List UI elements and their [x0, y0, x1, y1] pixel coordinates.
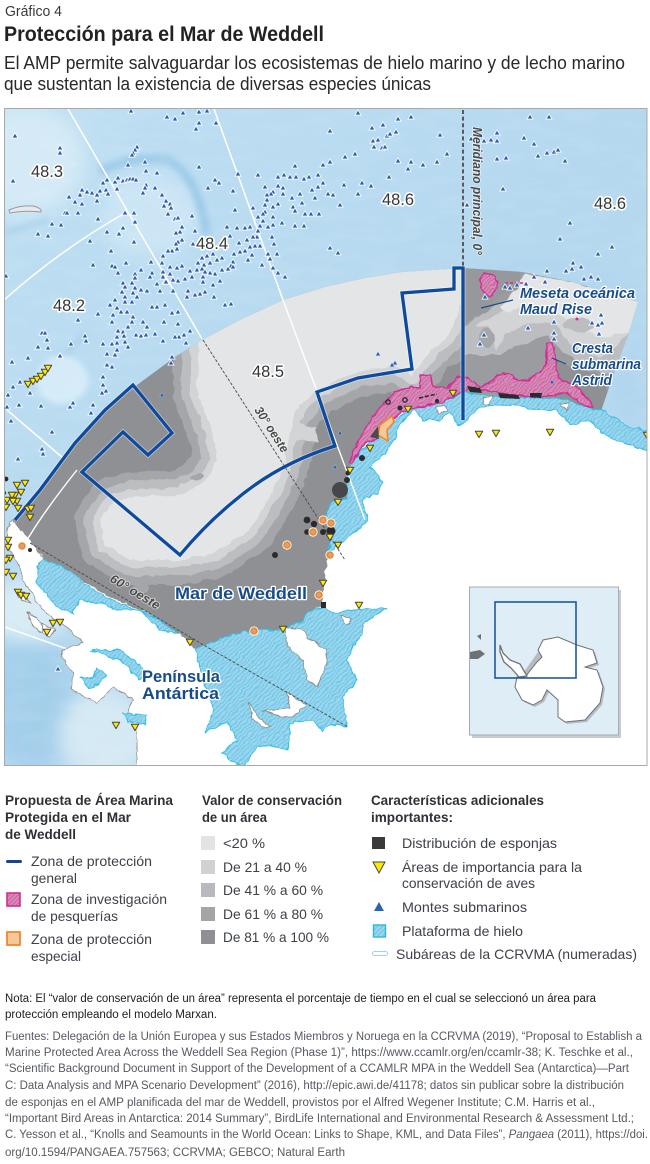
- pink dot: [576, 318, 578, 320]
- subarea labels: 48.4: [196, 235, 228, 253]
- peninsula islands: [16, 590, 55, 637]
- legend: conservation value: de un área: [202, 810, 267, 825]
- subarea labels: 48.5: [252, 363, 284, 381]
- legend: additional features: [371, 793, 637, 962]
- legend: proposed MPA: Zona de protección: [31, 853, 152, 869]
- west conservation contours: [100, 250, 466, 593]
- ice shelves: [37, 392, 650, 768]
- map panel: [0, 105, 650, 780]
- seamount swatch: [374, 902, 384, 911]
- ice shelf: small: [123, 713, 148, 724]
- fisheries research swatch: [7, 893, 20, 906]
- research zone: small strip: [505, 282, 527, 284]
- subarea labels: 48.3: [31, 163, 63, 181]
- legend: additional features: Subáreas de la CCRVMA (numeradas): [396, 946, 637, 962]
- land and ice group: [7, 392, 650, 770]
- legend: additional features: conservación de aves: [402, 875, 535, 891]
- legend: proposed MPA: Zona de protección: [31, 931, 152, 947]
- feature labels: Meseta oceánica: [520, 285, 635, 302]
- 60 degree meridian: [30, 543, 348, 727]
- subarea labels: 48.6: [382, 191, 414, 209]
- ice shelf: George VI: [80, 668, 106, 688]
- legend: conservation value: De 41 % a 60 %: [223, 882, 323, 898]
- map border: [4, 108, 647, 766]
- legend: proposed MPA: Protegida en el Mar: [5, 810, 132, 825]
- ice shelf: Filchner-Ronne: [195, 608, 387, 768]
- sources: [5, 1031, 648, 1159]
- legend: additional features: importantes:: [371, 810, 453, 825]
- sources: de esponjas en el AMP planificada del mar de Weddell, provistos por el Alfred Wegener Institute; C.M. Harris et al.,: [5, 1097, 595, 1109]
- sources: C: Data Analysis and MPA Scenario Development” (2016), http://epic.awi.de/41178; datos sin publicar sobre la distribución: [5, 1080, 624, 1092]
- legend: conservation value: [201, 793, 342, 945]
- sources: Marine Protected Area Across the Weddell Sea Region (Phase 1)”, https://www.ccamlr.org/en/ccamlr-38; K. Teschke et al.,: [5, 1047, 633, 1059]
- proposed MPA general protection zone: [15, 268, 463, 555]
- legend: additional features: Áreas de importancia para la: [402, 859, 582, 875]
- Antarctic land: [7, 392, 650, 770]
- legend: conservation value: De 21 a 40 %: [223, 859, 307, 875]
- sponge distribution: [2, 386, 542, 608]
- legend: proposed MPA: Zona de investigación: [31, 891, 167, 907]
- special protection swatch: [7, 932, 20, 945]
- legend: proposed MPA: de pesquerías: [31, 908, 118, 924]
- feature labels: Mar de Weddell: [175, 584, 307, 603]
- legend: additional features: Montes submarinos: [402, 899, 527, 915]
- inset locator map: [470, 587, 621, 738]
- subtitle: que sustentan la existencia de diversas especies únicas: [4, 73, 431, 94]
- special protection points: [22, 520, 331, 631]
- note: Nota: El “valor de conservación de un área” representa el porcentaje de tiempo en el cual se seleccionó un área para: [5, 993, 597, 1005]
- seamounts east: [328, 113, 612, 344]
- land islands in ice shelves: [249, 396, 570, 727]
- 30 degree meridian: [203, 340, 345, 560]
- seamounts inside protected area: [162, 354, 552, 467]
- feature labels: submarina: [572, 356, 641, 373]
- legend: proposed MPA: general: [31, 870, 77, 886]
- legend: additional features: Plataforma de hielo: [402, 923, 523, 939]
- ice shelf swatch: [374, 925, 386, 937]
- legend: additional features: Características adicionales: [371, 793, 544, 808]
- special protection zone: [378, 416, 394, 441]
- header: [4, 3, 625, 94]
- sources: “Scientific Background Document in Support of the Development of a CCAMLR MPA in the Weddell Sea (Antarctica)—Part: [5, 1063, 630, 1075]
- feature labels: Cresta: [572, 340, 613, 357]
- sources: “Important Bird Areas in Antarctica: 2014 Summary”, BirdLife International and Environmental Research & Assessment Ltd.;: [5, 1113, 634, 1125]
- feature labels: Antártica: [142, 685, 220, 703]
- ice shelf: Larsen: [37, 558, 178, 634]
- meridian labels: 60° oeste: [107, 572, 163, 612]
- east conservation contours: [464, 268, 638, 410]
- title: Protección para el Mar de Weddell: [4, 23, 324, 46]
- research zone: Astrid and coast: [350, 343, 593, 463]
- feature labels: [142, 285, 641, 703]
- legend: proposed MPA: Propuesta de Área Marina: [5, 793, 173, 808]
- meridian labels: Meridiano principal, 0°: [470, 127, 484, 256]
- ice shelf: northern peninsula: [90, 650, 148, 680]
- research zone: Maud Rise: [480, 273, 497, 298]
- sources: Fuentes: Delegación de la Unión Europea y sus Estados Miembros y Noruega en la CCRVMA (2019), “Proposal to Establish a: [5, 1031, 643, 1043]
- note: protección empleando el modelo Marxan.: [5, 1009, 217, 1021]
- legend: additional features: Distribución de esponjas: [402, 835, 557, 851]
- legend: conservation value: De 81 % a 100 %: [223, 929, 329, 945]
- feature labels: Maud Rise: [520, 301, 592, 318]
- subtitle: [4, 52, 625, 94]
- bird conservation areas: [6, 368, 647, 727]
- subarea labels: 48.2: [53, 297, 85, 315]
- subarea boundaries over land and surface: [27, 300, 365, 540]
- sources: org/10.1594/PANGAEA.757563; CCRVMA; GEBCO; Natural Earth: [5, 1147, 345, 1159]
- legend: conservation value: De 61 % a 80 %: [223, 906, 323, 922]
- chart number: Gráfico 4: [5, 3, 62, 20]
- prime meridian: [462, 110, 464, 268]
- ocean bathymetry: [0, 105, 648, 780]
- note: [5, 993, 597, 1021]
- legend: conservation value: <20 %: [223, 835, 265, 851]
- legend: proposed MPA: [5, 793, 173, 964]
- ice shelf: east Weddell coast: [325, 392, 650, 553]
- research zones group: [350, 273, 593, 463]
- meridian labels: 30° oeste: [251, 404, 292, 455]
- feature labels: Península: [142, 668, 221, 686]
- sources: C. Yesson et al., “Knolls and Seamounts in the World Ocean: Links to Shape, KML, and Data Files”, Pangaea (2011), https://doi.: [5, 1129, 648, 1141]
- legend: conservation value: Valor de conservación: [202, 793, 342, 808]
- meridian labels: [107, 127, 484, 612]
- subarea swatch: [372, 952, 388, 956]
- subarea labels: 48.6: [594, 195, 626, 213]
- bird area swatch: [373, 862, 385, 873]
- legend: proposed MPA: especial: [31, 948, 81, 964]
- general protection swatch: [6, 860, 22, 863]
- subarea boundaries over ocean: [4, 109, 283, 650]
- sponge swatch: [372, 837, 385, 849]
- legend: proposed MPA: de Weddell: [5, 827, 76, 842]
- subtitle: El AMP permite salvaguardar los ecosistemas de hielo marino y de lecho marino: [4, 52, 625, 73]
- subarea labels: [31, 163, 626, 381]
- conservation value surface: [15, 268, 638, 648]
- feature labels: Astrid: [571, 372, 613, 389]
- seamounts over ocean: [6, 111, 323, 669]
